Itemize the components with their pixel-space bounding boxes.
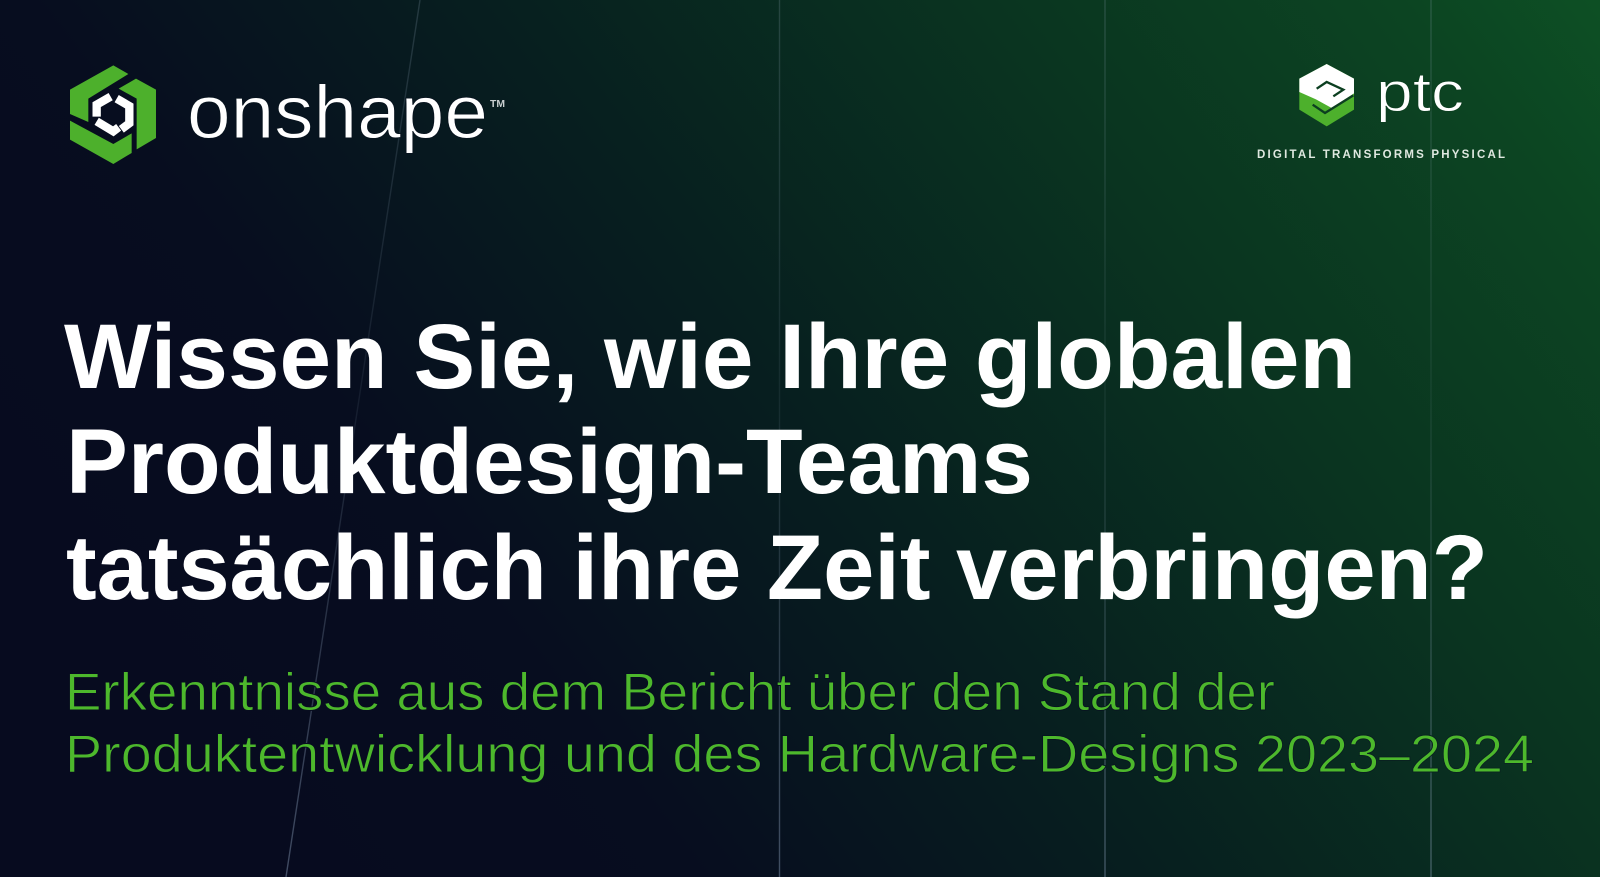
wordmark: onshape: onshape xyxy=(187,70,488,154)
trademark sign: TM xyxy=(490,99,505,110)
title: Produktdesign-Teams xyxy=(66,411,1033,513)
decorative thin lines xyxy=(286,0,1431,877)
title: tatsächlich ihre Zeit verbringen? xyxy=(66,517,1488,619)
ptc logo xyxy=(1257,60,1505,161)
title: Wissen Sie, wie Ihre globalen xyxy=(64,306,1356,408)
title xyxy=(64,306,1488,619)
subtitle: Erkenntnisse aus dem Bericht über den Stand der xyxy=(65,663,1275,722)
tagline: DIGITAL TRANSFORMS PHYSICAL xyxy=(1257,149,1505,161)
icon: ptc hexagon xyxy=(1299,64,1354,126)
subtitle: Produktentwicklung und des Hardware-Designs 2023–2024 xyxy=(65,725,1534,784)
subtitle xyxy=(65,663,1534,784)
onshape logo xyxy=(70,65,505,164)
icon: onshape hexagon xyxy=(70,65,156,164)
wordmark: ptc: ptc xyxy=(1376,60,1464,123)
